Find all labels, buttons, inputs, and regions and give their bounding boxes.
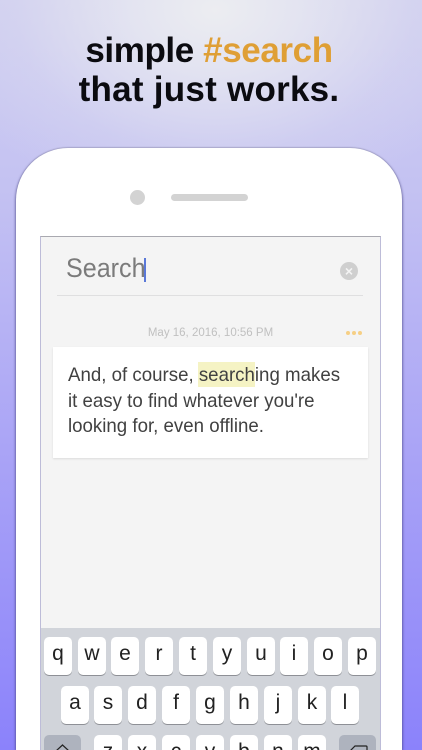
delete key bbox=[339, 735, 376, 750]
key row 1: y bbox=[222, 642, 232, 665]
clear button: × bbox=[345, 263, 353, 279]
text cursor bbox=[144, 258, 146, 282]
key row 2: g bbox=[204, 691, 216, 714]
keyboard bbox=[41, 628, 380, 750]
clear button bbox=[340, 262, 358, 280]
key row 1: t bbox=[190, 642, 196, 665]
key row 1 bbox=[44, 637, 376, 676]
phone body bbox=[16, 148, 402, 750]
note card bbox=[53, 347, 368, 458]
keyboard keys bbox=[44, 637, 376, 750]
speaker bbox=[171, 194, 248, 201]
key row 3 bbox=[44, 735, 376, 750]
key row 2 bbox=[61, 686, 359, 725]
shift key bbox=[44, 735, 81, 750]
title: simple #search bbox=[85, 31, 333, 70]
key row 2: h bbox=[238, 691, 250, 714]
key row 2: k bbox=[307, 691, 317, 714]
key row 2: l bbox=[343, 691, 347, 714]
note text: looking for, even offline. bbox=[68, 415, 264, 437]
key row 1: q bbox=[52, 642, 64, 665]
key row 1: u bbox=[255, 642, 267, 665]
more dots bbox=[346, 331, 362, 335]
key row 1: e bbox=[119, 642, 131, 665]
key row 1: r bbox=[156, 642, 162, 665]
search highlight bbox=[198, 362, 255, 387]
phone screen bbox=[40, 236, 381, 750]
key row 1: i bbox=[292, 642, 296, 665]
key row 1: o bbox=[322, 642, 334, 665]
title: that just works. bbox=[79, 70, 339, 109]
camera bbox=[130, 190, 145, 205]
note text bbox=[68, 364, 340, 437]
key row 2: j bbox=[276, 691, 280, 714]
key row 2: d bbox=[136, 691, 148, 714]
key row 2: s bbox=[103, 691, 113, 714]
note text: it easy to find whatever you're bbox=[68, 390, 315, 412]
search underline bbox=[57, 295, 363, 296]
key row 2: f bbox=[173, 691, 179, 714]
key row 1: p bbox=[356, 642, 368, 665]
search input text: Search bbox=[66, 253, 146, 283]
key row 2: a bbox=[69, 691, 81, 714]
note text: And, of course, searching makes bbox=[68, 364, 340, 386]
note timestamp: May 16, 2016, 10:56 PM bbox=[148, 327, 273, 339]
title bbox=[79, 31, 339, 109]
key row 1: w bbox=[84, 642, 100, 665]
